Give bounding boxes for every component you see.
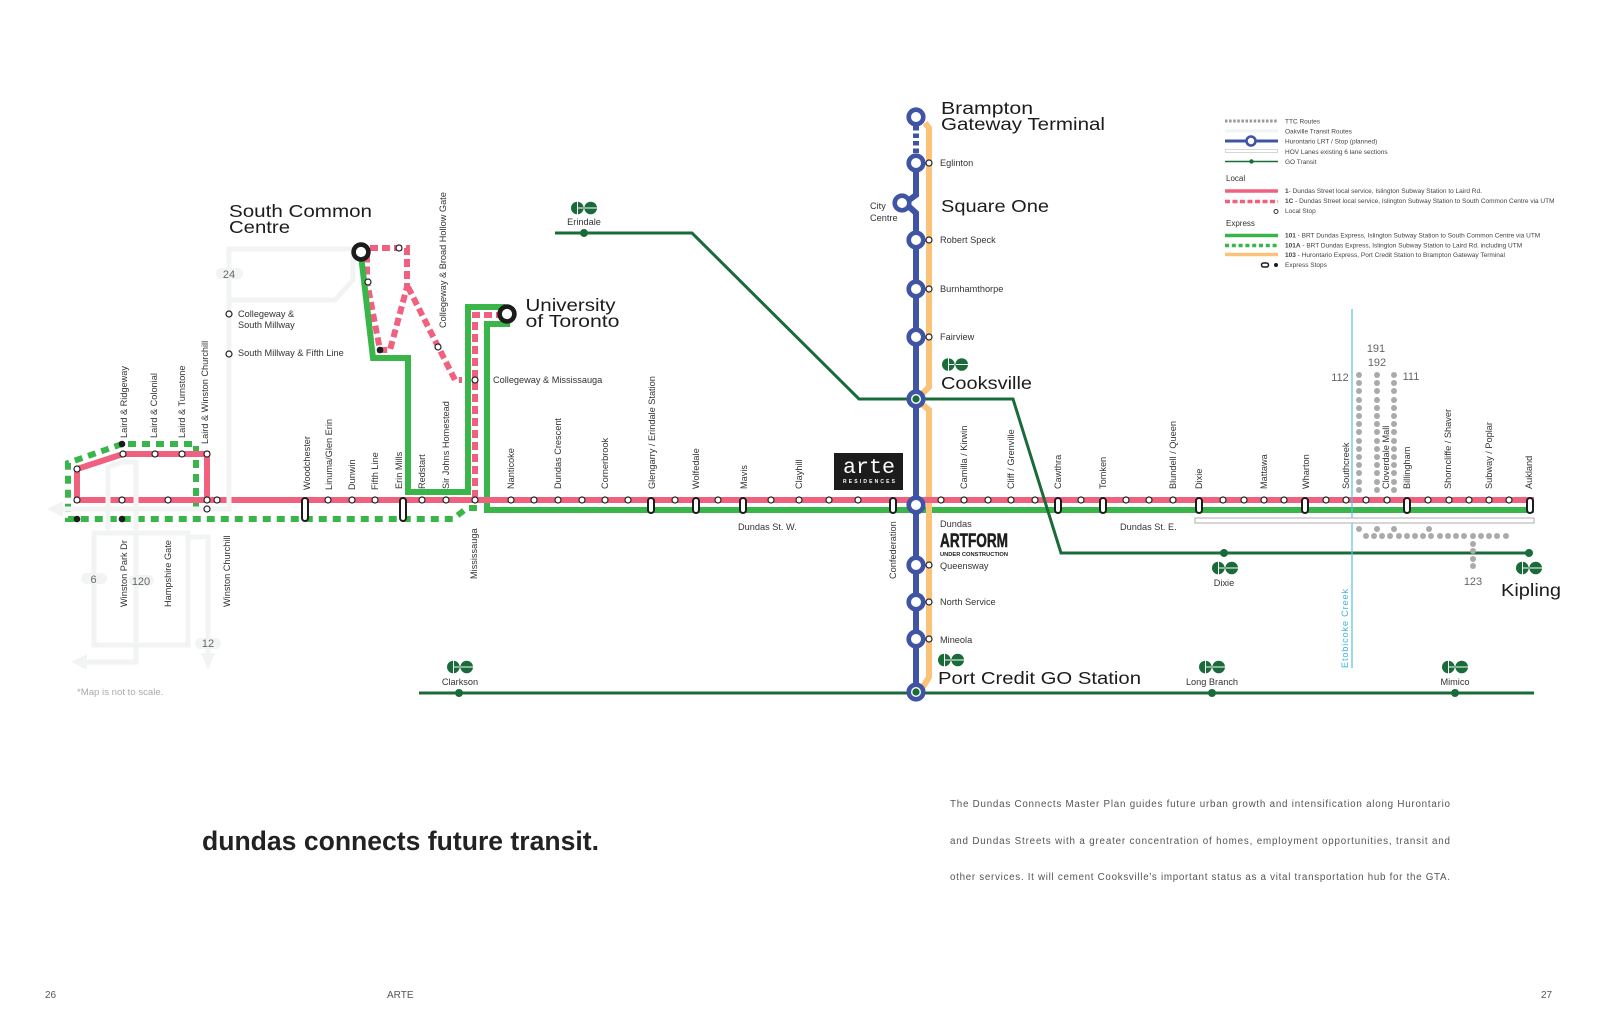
major station labels: Centre [229,217,290,237]
legend: Express Stops [1285,262,1328,269]
line: Hurontario LRT blue [905,163,916,692]
artform logo: ARTFORM [940,531,1008,552]
TTC route numbers: 123 [1464,576,1482,588]
vertical stop labels [119,192,1534,668]
vertical stop labels: Shorncliffe / Shaver [1443,409,1453,489]
line: 101 express solid green [361,255,1534,510]
TTC routes dotted [1356,372,1509,569]
line: 1 local solid pink [77,454,1534,500]
horizontal stop labels: Long Branch [1186,677,1238,687]
artform logo [940,531,1008,558]
legend: Local Stop [1285,208,1316,215]
legend: 103 - Hurontario Express, Port Credit Station to Brampton Gateway Terminal [1285,252,1505,259]
line: Hurontario LRT dashed extension [913,126,919,156]
body text: and Dundas Streets with a greater concentration of homes, employment opportunities, transit and [950,836,1450,847]
map scale note: *Map is not to scale. [77,687,163,698]
legend: Local [1226,174,1245,183]
vertical stop labels: Redstart [417,454,427,489]
horizontal stop labels: Collegeway & [238,309,294,319]
vertical stop labels: Southcreek [1341,442,1351,489]
HOV lanes box [1195,518,1534,523]
vertical stop labels: Cliff / Grenville [1006,429,1016,489]
vertical stop labels: Collegeway & Broad Hollow Gate [438,192,448,328]
legend: 101A - BRT Dundas Express, Islington Subway Station to Laird Rd. including UTM [1285,242,1522,250]
horizontal stop labels [238,158,1470,687]
local stops [74,160,1512,642]
major station labels: of Toronto [526,311,620,331]
vertical stop labels: Blundell / Queen [1168,421,1178,489]
vertical stop labels: Dundas Crescent [553,418,563,489]
Oakville Transit routes: 120 [132,576,150,588]
body text: The Dundas Connects Master Plan guides future urban growth and intensification along Hurontario [950,799,1451,810]
horizontal stop labels: Eglinton [940,158,973,168]
TTC route numbers: 191 [1367,343,1385,355]
horizontal stop labels: Dundas [940,519,972,529]
Oakville Transit routes [47,249,353,670]
line: 103 Hurontario express orange [923,123,929,687]
horizontal stop labels: Dixie [1214,578,1234,588]
horizontal stop labels: Mimico [1440,677,1470,687]
vertical stop labels: Camilla / Kirwin [959,426,969,489]
legend [1225,118,1555,269]
line: 101A express dashed green [68,444,482,519]
horizontal stop labels: Queensway [940,561,989,571]
major station labels: South Common [229,201,372,221]
arte residences logo: RESIDENCES [843,479,896,485]
vertical stop labels: Wolfedale [691,448,701,489]
major station labels: Cooksville [941,373,1032,393]
Oakville Transit routes: 12 [202,638,214,650]
express stops [74,347,1533,522]
legend: TTC Routes [1285,118,1321,126]
vertical stop labels: Aukland [1524,456,1534,489]
vertical stop labels: Linuma/Glen Erin [324,419,334,490]
vertical stop labels: Sir Johns Homestead [441,401,451,489]
horizontal stop labels: Erindale [567,217,601,227]
horizontal stop labels: North Service [940,597,996,607]
vertical stop labels: Cornerbrook [600,438,610,489]
page footer [45,990,1553,1001]
horizontal stop labels: Mineola [940,635,973,645]
terminals [354,245,514,321]
horizontal stop labels: Burnhamthorpe [940,284,1003,294]
vertical stop labels: Mississauga [469,528,479,579]
vertical stop labels: Erin Mills [394,451,404,489]
horizontal stop labels: South Millway [238,320,295,330]
horizontal stop labels: Clarkson [442,677,478,687]
vertical stop labels: Woodchester [302,436,312,490]
line: 1C local dashed pink [367,248,500,498]
body text: other services. It will cement Cooksville's important status as a vital transportation hub for the GTA. [950,872,1450,883]
TTC route numbers: 111 [1403,371,1419,383]
vertical stop labels: Winston Park Dr [119,540,129,607]
vertical stop labels: Hampshire Gate [163,540,173,607]
vertical stop labels: Wharton [1301,454,1311,489]
TTC route numbers [1331,343,1482,588]
page footer: ARTE [387,990,414,1001]
legend: Oakville Transit Routes [1285,128,1353,136]
vertical stop labels: Laird & Turnstone [177,365,187,438]
page footer: 26 [45,990,57,1001]
vertical stop labels: Fifth Line [370,452,380,490]
vertical stop labels: Glengarry / Erindale Station [647,376,657,489]
vertical stop labels: Cawthra [1053,454,1063,489]
vertical stop labels: Dixie [1194,469,1204,489]
Oakville Transit routes: 24 [223,269,235,281]
major station labels: Kipling [1501,580,1561,600]
legend: Hurontario LRT / Stop (planned) [1285,138,1377,146]
vertical stop labels: Dunwin [347,459,357,490]
Oakville Transit routes: 6 [90,574,97,586]
vertical stop labels: Subway / Poplar [1484,422,1494,489]
major station labels: Brampton [941,98,1033,118]
line: GO Transit Lakeshore [419,692,1534,694]
major station labels: Port Credit GO Station [938,668,1141,688]
vertical stop labels: Confederation [888,521,898,579]
page footer: 27 [1541,990,1553,1001]
vertical stop labels: Cloverdale Mall [1381,426,1391,489]
vertical stop labels: Mattawa [1259,453,1269,489]
horizontal stop labels: Robert Speck [940,235,996,245]
arte residences logo [834,453,903,490]
legend: GO Transit [1285,159,1317,166]
major station labels: Gateway Terminal [941,114,1105,134]
major station labels: University [526,295,616,315]
legend: Express [1226,219,1255,228]
arte residences logo: arte [843,457,895,480]
legend: 1- Dundas Street local service, Islington Subway Station to Laird Rd. [1285,188,1482,195]
GO stations [455,229,1533,697]
legend: 101 - BRT Dundas Express, Islington Subway Station to South Common Centre via UTM [1285,232,1540,240]
vertical stop labels: Mavis [739,465,749,489]
TTC route numbers: 112 [1331,372,1349,384]
horizontal stop labels: Collegeway & Mississauga [493,375,603,385]
vertical stop labels: Etobicoke Creek [1340,589,1350,668]
major station labels: Square One [941,196,1049,216]
legend: HOV Lanes existing 6 lane sections [1285,149,1388,156]
horizontal stop labels: Fairview [940,332,975,342]
horizontal stop labels: City [870,201,886,211]
vertical stop labels: Laird & Colonial [149,373,159,438]
Etobicoke Creek line [1351,309,1353,668]
horizontal stop labels: Dundas St. E. [1120,522,1177,532]
vertical stop labels: Laird & Ridgeway [119,366,129,438]
vertical stop labels: Winston Churchill [222,536,232,607]
vertical stop labels: Billingham [1402,446,1412,489]
artform logo: UNDER CONSTRUCTION [940,552,1008,558]
horizontal stop labels: South Millway & Fifth Line [238,348,344,358]
horizontal stop labels: Centre [870,213,898,223]
TTC route numbers: 192 [1368,357,1386,369]
GO logos [447,201,1542,674]
body text [950,799,1451,883]
vertical stop labels: Laird & Winston Churchill [200,341,210,444]
title: dundas connects future transit. [202,826,599,856]
vertical stop labels: Tomken [1098,457,1108,489]
vertical stop labels: Nanticoke [506,448,516,489]
LRT stations [895,110,923,699]
vertical stop labels: Clayhill [794,459,804,489]
legend: 1C - Dundas Street local service, Islington Subway Station to South Common Centre via UTM [1285,198,1555,205]
major station labels [229,98,1561,688]
horizontal stop labels: Dundas St. W. [738,522,797,532]
line: GO Transit Milton branch [555,233,1529,553]
